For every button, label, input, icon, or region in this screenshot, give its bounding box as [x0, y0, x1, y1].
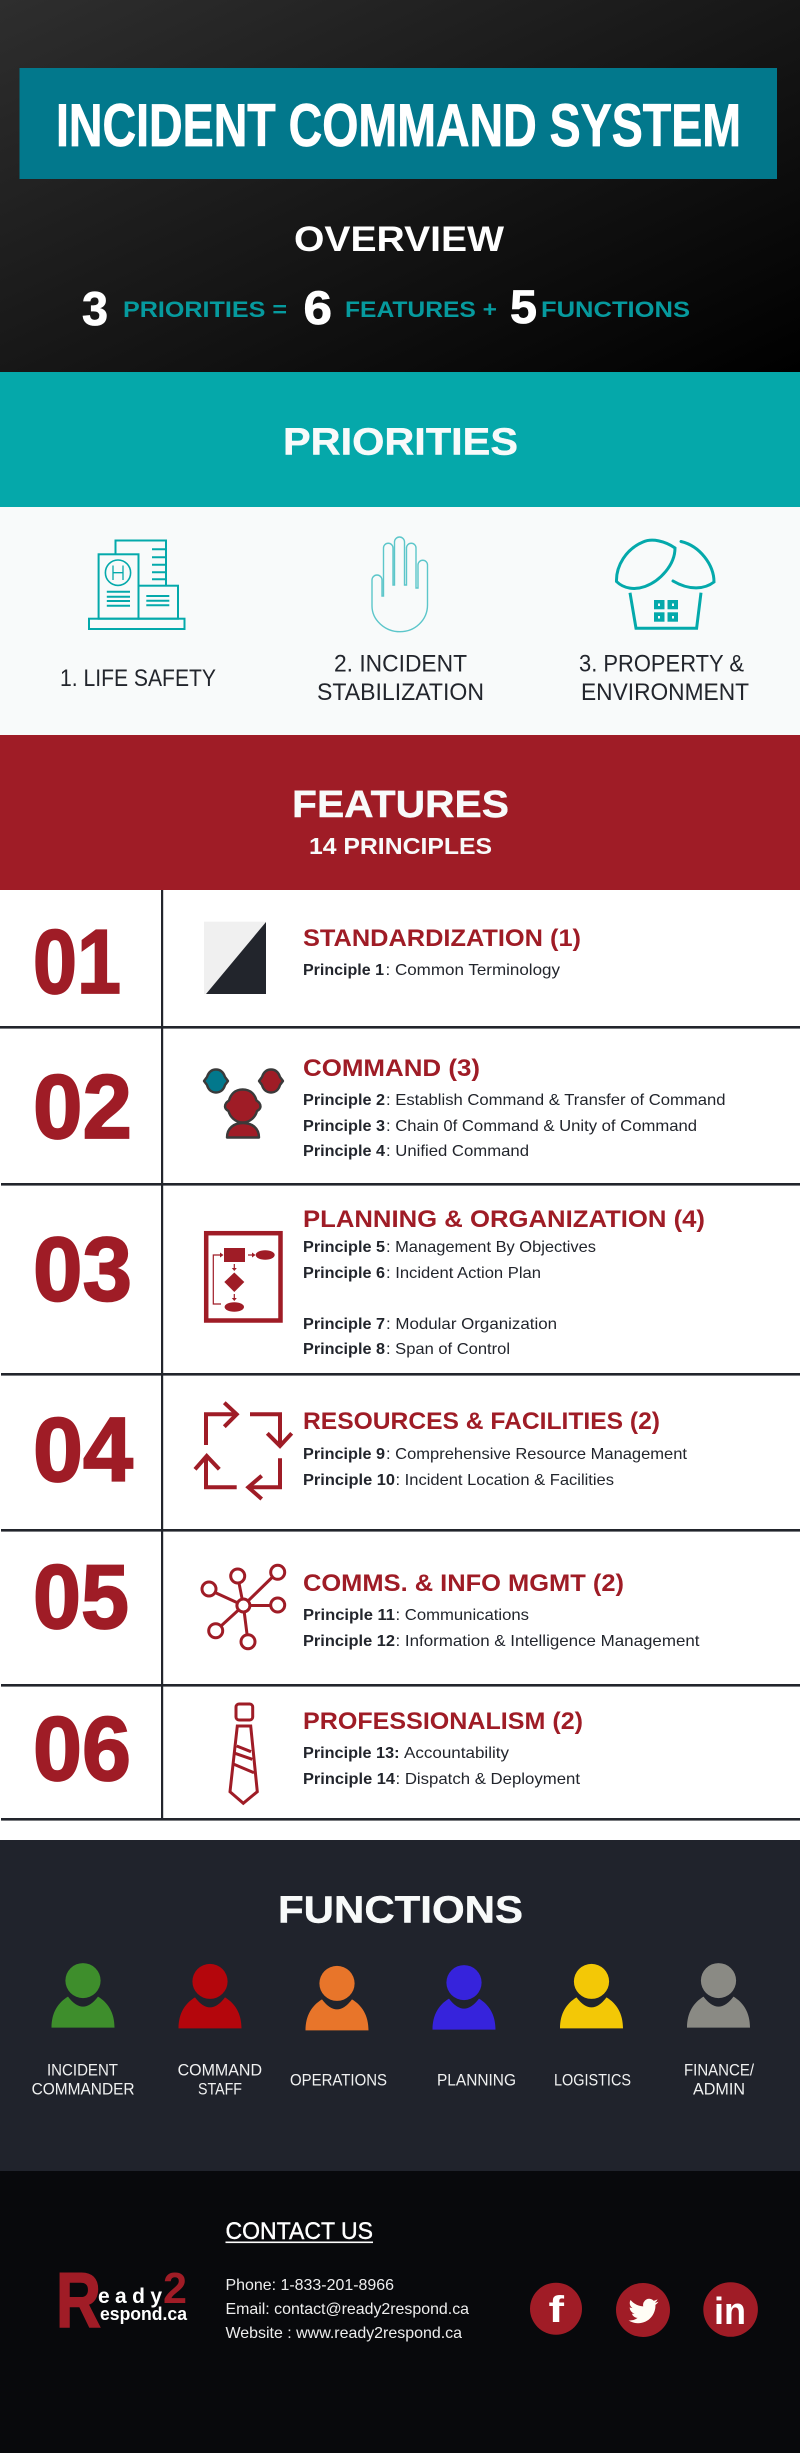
overview equation: 6	[304, 281, 332, 334]
row 02: command: : Chain 0f Command & Unity of Command	[386, 1118, 697, 1135]
icon: necktie	[230, 1704, 257, 1803]
row 02: command: Principle 2	[303, 1092, 385, 1109]
icon: property and environment	[616, 540, 714, 628]
function: planning	[432, 1965, 516, 2090]
row 06: professionalism: : Dispatch & Deployment	[396, 1771, 581, 1788]
row 06: professionalism: Principle 13:	[303, 1745, 400, 1762]
row 05: comms and info management: : Communications	[396, 1607, 529, 1624]
icon: hospital	[89, 540, 184, 629]
panel: functions	[0, 1840, 800, 2171]
row 04: resources and facilities: : Comprehensive Resource Management	[386, 1446, 688, 1463]
icon: twitter	[616, 2283, 670, 2337]
label: incident stabilization	[317, 650, 484, 706]
logo: R	[56, 2256, 101, 2344]
function: logistics	[554, 1964, 631, 2090]
row 06: professionalism: Principle 14	[303, 1771, 395, 1788]
subheading: 14 PRINCIPLES	[309, 833, 492, 859]
row 03: planning and organization	[33, 1206, 705, 1358]
icon: linkedin	[703, 2282, 758, 2337]
row 05: comms and info management: : Information & Intelligence Management	[396, 1633, 700, 1650]
function: operations	[290, 1966, 387, 2090]
row 03: planning and organization: Principle 7	[303, 1316, 385, 1333]
contact details: Website : www.ready2respond.ca	[226, 2325, 462, 2342]
row 02: command	[33, 1055, 726, 1160]
row 03: planning and organization: 03	[33, 1220, 132, 1321]
row 01: standardization	[33, 912, 581, 1013]
function: planning: PLANNING	[437, 2070, 516, 2090]
function: operations: OPERATIONS	[290, 2070, 387, 2090]
row 03: planning and organization: Principle 8	[303, 1341, 385, 1358]
row 03: planning and organization: : Modular Organization	[386, 1316, 557, 1333]
panel: priorities	[0, 507, 800, 735]
functions heading: FUNCTIONS	[278, 1890, 523, 1932]
row 03: planning and organization: Principle 6	[303, 1265, 385, 1282]
overview equation: FUNCTIONS	[541, 297, 690, 322]
label: property and environment: 3. PROPERTY &	[579, 650, 744, 678]
title banner	[20, 68, 777, 179]
row 01: standardization: STANDARDIZATION (1)	[303, 925, 581, 952]
function: incident commander: COMMANDER	[32, 2080, 135, 2099]
logo	[56, 2256, 188, 2344]
icon: raised hand	[372, 537, 428, 632]
row 04: resources and facilities: Principle 9	[303, 1446, 385, 1463]
overview equation: 5	[510, 280, 537, 333]
label: incident stabilization: 2. INCIDENT	[334, 650, 467, 678]
row 06: professionalism: Accountability	[404, 1745, 509, 1762]
panel: priorities heading	[0, 372, 800, 507]
row 03: planning and organization: Principle 5	[303, 1239, 385, 1256]
label: life safety: 1. LIFE SAFETY	[60, 665, 216, 692]
overview equation: 3	[82, 282, 108, 335]
icon: linkedin: in	[714, 2291, 746, 2333]
row 05: comms and info management	[33, 1547, 700, 1650]
row 05: comms and info management: COMMS. & INFO MGMT (2)	[303, 1570, 624, 1597]
row 02: command: : Unified Command	[386, 1143, 529, 1160]
overview equation: PRIORITIES =	[123, 297, 287, 322]
row 04: resources and facilities	[33, 1400, 688, 1501]
icon: standardization square	[204, 922, 266, 994]
row 04: resources and facilities: : Incident Location & Facilities	[396, 1472, 614, 1489]
icon: flow chart	[206, 1233, 280, 1320]
overview equation: FEATURES +	[345, 297, 497, 322]
row 03: planning and organization: PLANNING & ORGANIZATION (4)	[303, 1206, 705, 1233]
panel: header	[0, 0, 800, 372]
row 02: command: : Establish Command & Transfer of Command	[386, 1092, 726, 1109]
function: logistics: LOGISTICS	[554, 2070, 631, 2090]
label: incident stabilization: STABILIZATION	[317, 679, 484, 706]
row 05: comms and info management: Principle 11	[303, 1607, 395, 1624]
panel: features table	[0, 890, 800, 1840]
label: property and environment: ENVIRONMENT	[581, 679, 749, 706]
row 03: planning and organization: : Incident Action Plan	[386, 1265, 541, 1282]
function: command staff: COMMAND	[178, 2060, 262, 2080]
function: incident commander: INCIDENT	[47, 2060, 118, 2080]
icon: facebook: f	[548, 2289, 565, 2330]
panel: features heading: FEATURES	[292, 784, 509, 826]
label: property and environment	[579, 650, 749, 706]
icon: network	[202, 1565, 285, 1649]
function: command staff: STAFF	[198, 2080, 242, 2099]
row 04: resources and facilities: 04	[33, 1400, 133, 1501]
row 02: command: 02	[33, 1057, 132, 1158]
function: finance and admin: FINANCE/	[684, 2060, 754, 2080]
function: incident commander	[32, 1963, 135, 2099]
overview equation	[82, 280, 690, 335]
row 05: comms and info management: Principle 12	[303, 1633, 395, 1650]
row 01: standardization: : Common Terminology	[386, 962, 560, 979]
function: finance and admin	[684, 1963, 754, 2099]
icon: cycle arrows	[195, 1403, 292, 1499]
panel: features heading	[0, 735, 800, 890]
icon: facebook	[530, 2283, 582, 2335]
row 06: professionalism: 06	[33, 1699, 131, 1800]
overview heading: OVERVIEW	[294, 220, 504, 259]
contact details	[226, 2277, 469, 2342]
row 01: standardization: 01	[33, 912, 121, 1013]
contact heading: CONTACT US	[226, 2218, 373, 2245]
row 02: command: COMMAND (3)	[303, 1055, 480, 1082]
row 01: standardization: Principle 1	[303, 962, 384, 979]
row 02: command: Principle 3	[303, 1118, 385, 1135]
row 06: professionalism: PROFESSIONALISM (2)	[303, 1708, 583, 1735]
row 02: command: Principle 4	[303, 1143, 385, 1160]
contact details: Phone: 1-833-201-8966	[226, 2277, 394, 2294]
row 05: comms and info management: 05	[33, 1547, 129, 1648]
row 04: resources and facilities: Principle 10	[303, 1472, 395, 1489]
panel: footer	[0, 2171, 800, 2453]
function: finance and admin: ADMIN	[693, 2080, 745, 2099]
panel: priorities heading: PRIORITIES	[283, 422, 518, 464]
row 04: resources and facilities: RESOURCES & FACILITIES (2)	[303, 1408, 660, 1435]
row 03: planning and organization: : Span of Control	[386, 1341, 510, 1358]
row 06: professionalism	[33, 1699, 583, 1803]
function: command staff	[178, 1964, 262, 2099]
icon: command people	[204, 1070, 283, 1138]
row 03: planning and organization: : Management By Objectives	[386, 1239, 596, 1256]
logo: eady	[98, 2285, 162, 2308]
contact details: Email: contact@ready2respond.ca	[226, 2301, 469, 2318]
logo: 2	[163, 2264, 187, 2313]
logo: espond.ca	[100, 2304, 188, 2324]
